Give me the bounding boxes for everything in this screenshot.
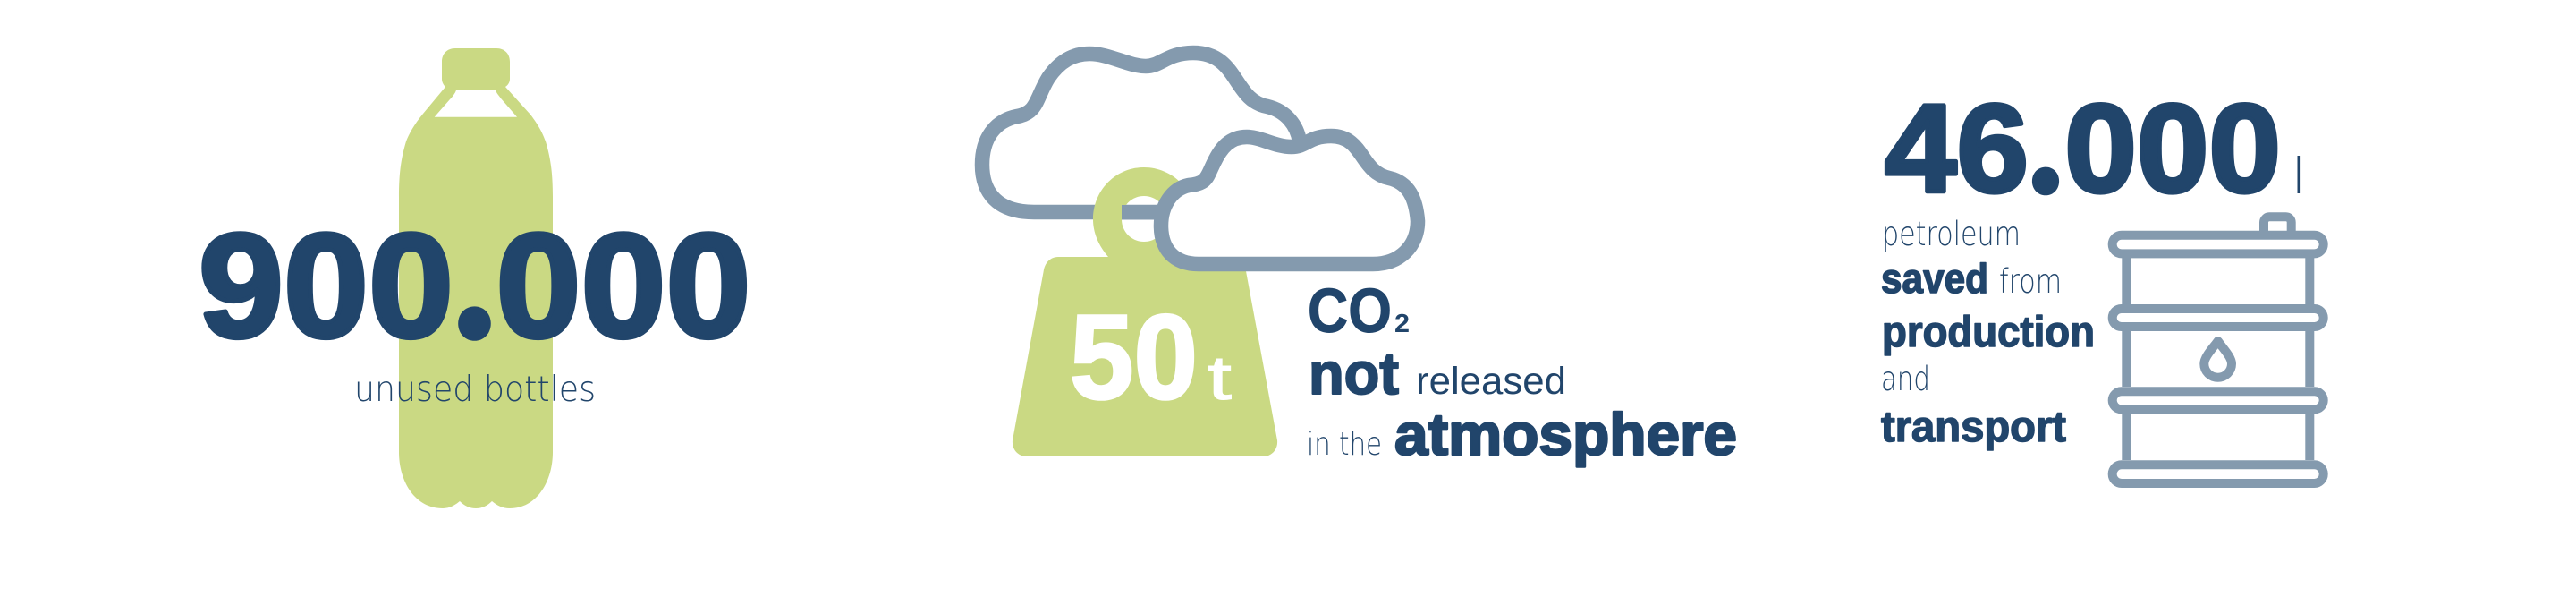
icon: weight	[1013, 167, 1277, 456]
unit: l	[2297, 156, 2300, 193]
caption: CO2 not released in the atmosphere: not	[1309, 340, 1399, 406]
caption: petroleum saved from production and transport: saved	[1881, 255, 1988, 302]
icon: oil barrel	[2113, 217, 2324, 483]
caption: petroleum saved from production and transport	[1881, 215, 2095, 451]
icon: plastic bottle	[399, 48, 553, 508]
big number: .	[445, 131, 504, 390]
big number	[1885, 22, 2281, 236]
big number: 000	[2064, 78, 2281, 218]
panel: petroleum	[1881, 22, 2324, 483]
caption: petroleum saved from production and transport: and	[1881, 360, 1930, 398]
caption: petroleum saved from production and transport: production	[1882, 309, 2095, 356]
big number	[199, 131, 751, 390]
icon: front cloud	[1161, 136, 1418, 264]
big number: 46	[1885, 78, 2029, 218]
big number: .	[2021, 22, 2070, 236]
panel: CO2	[982, 53, 1737, 467]
caption: CO2 not released in the atmosphere: in the	[1307, 426, 1382, 463]
big number: 900	[199, 203, 453, 368]
caption: petroleum saved from production and transport: transport	[1881, 404, 2066, 451]
caption: petroleum saved from production and transport: petroleum	[1882, 215, 2021, 253]
caption: CO2 not released in the atmosphere: released	[1416, 360, 1566, 403]
panel: bottles	[199, 48, 751, 508]
caption: CO2 not released in the atmosphere	[1307, 276, 1737, 467]
icon: back cloud	[982, 53, 1300, 212]
weight value: 50 t: 50	[1070, 291, 1198, 424]
caption: CO2 not released in the atmosphere: atmosphere	[1394, 401, 1737, 467]
back cloud line inside ring	[1122, 205, 1166, 220]
weight value: 50 t: t	[1208, 343, 1232, 413]
caption: CO2 not released in the atmosphere: 2	[1394, 310, 1410, 338]
label: unused bottles: unused bottles	[354, 370, 596, 410]
caption: petroleum saved from production and transport: from	[1999, 262, 2062, 301]
big number: 000	[496, 203, 751, 368]
caption: CO2 not released in the atmosphere: CO	[1308, 276, 1392, 345]
